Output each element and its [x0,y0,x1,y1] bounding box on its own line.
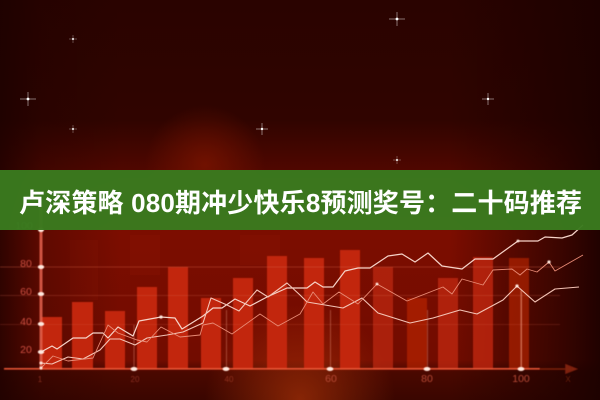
x axis labels: 60 [325,373,337,385]
y axis labels: 20 [20,344,32,356]
x axis labels: X [565,375,571,384]
y axis labels: 60 [20,286,32,298]
line: upper white series [41,225,583,352]
axis arrow [540,365,576,373]
data point markers [38,228,551,371]
grid lines and axes [0,205,560,370]
stars [20,12,494,164]
x axis labels: 40 [225,375,234,384]
y axis labels [15,220,33,356]
x axis labels: 1 [38,375,43,384]
line series [41,225,583,368]
y axis labels: 100 [15,220,33,232]
y axis labels: 80 [20,258,32,270]
line: lower white series [41,283,579,364]
title: 卢深策略 080期冲少快乐8预测奖号：二十码推荐 [19,188,582,218]
x axis labels [38,373,571,385]
x axis labels: 80 [421,373,433,385]
x axis labels: 20 [131,375,140,384]
x axis labels: 100 [512,373,530,385]
bar chart [41,250,529,369]
y axis labels: 40 [20,316,32,328]
line: thin pink series [41,255,583,368]
title banner [0,170,600,230]
